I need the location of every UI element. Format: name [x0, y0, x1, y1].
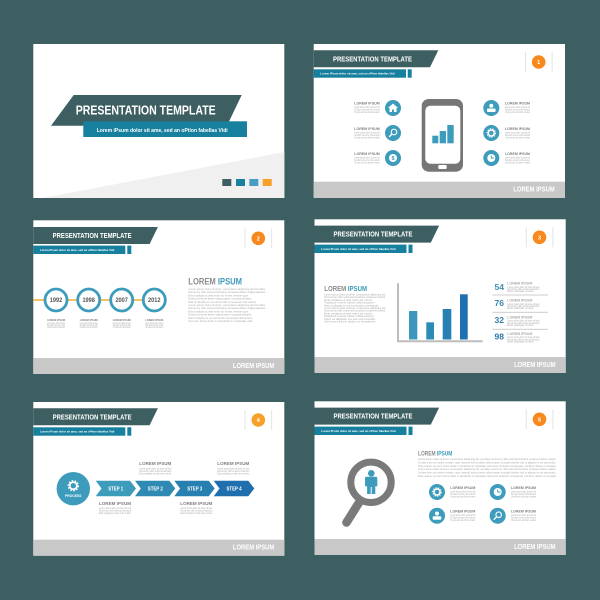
- stat 98: LOREM IPSUM: [507, 332, 532, 336]
- header title: PRESENTATION TEMPLATE: [333, 54, 412, 63]
- icon: home: [385, 100, 401, 116]
- step note 1: Lorem ipsum dolor sit amet elit sed: [99, 507, 131, 510]
- milestone caption 4: LOREM IPSUM: [145, 318, 164, 322]
- stat 32: Lorem ipsum dolor sit amet elit sed: [507, 320, 540, 323]
- stat 76: [494, 298, 540, 310]
- page badge: [245, 410, 272, 430]
- feature label right 3: Lorem ipsum dolor sit amet elit: [505, 156, 530, 159]
- stat 32: Nonummy nibh euismod tincidunt: [507, 322, 540, 325]
- chart body text: Erat volutpat ut wisi enim ad minim: [324, 299, 372, 302]
- footer bar: [314, 539, 566, 555]
- footer bar: LOREM IPSUM: [513, 185, 555, 194]
- milestone caption 4: Ut wisi enim ad minim: [145, 326, 163, 329]
- milestone 2007: 2007: [115, 298, 129, 304]
- search body text: Ut wisi enim ad minim veniam, quis nostrud exerci tation ullamcorper suscipit lobortis nisl ut aliquip ex ea commodo: [418, 472, 556, 475]
- feature label 3: [450, 510, 476, 522]
- milestone 1992: 1992: [50, 298, 63, 304]
- feature label right 3: Sed diam nonummy nibh euismod: [505, 159, 530, 162]
- feature label right 1: LOREM IPSUM: [505, 101, 530, 105]
- text block body: Nostrud exerci tation ullamcorper suscipit lobortis: [188, 314, 252, 317]
- feature label 1: Sed diam nonummy nibh euismod: [450, 493, 476, 496]
- subtitle: Lorem iPsum dolor sit ame, sed an oPtion fabellas Vidi: [97, 128, 228, 134]
- feature label left 2: Sed diam nonummy nibh euismod: [354, 134, 380, 137]
- page badge: 1: [537, 60, 540, 66]
- milestone caption 2: [80, 318, 98, 329]
- chart body text: Nonummy nibh euismod tincidunt ut laoreet dolore: [324, 296, 386, 299]
- feature label left 1: Lorem ipsum dolor sit amet elit: [354, 106, 380, 109]
- feature label 2: Ut wisi enim ad minim veniam: [511, 496, 536, 498]
- feature label left 2: [354, 127, 380, 139]
- footer bar: [33, 358, 284, 374]
- milestone caption 2: LOREM IPSUM: [80, 318, 98, 322]
- step note 3: [180, 501, 213, 515]
- feature label right 3: Ut wisi enim ad minim veniam: [505, 161, 530, 164]
- milestone caption 2: Ut wisi enim ad minim: [80, 326, 98, 329]
- feature label left 1: Ut wisi enim ad minim veniam: [354, 111, 380, 114]
- milestone caption 3: [113, 318, 131, 329]
- stat 76: Nonummy nibh euismod tincidunt: [507, 305, 540, 308]
- feature label 2: [511, 486, 536, 498]
- search body text: Lorem ipsum dolor sit amet, consectetur adipiscing elit, sed diam nonummy nibh euismod tincidunt ut laoreet dolore magna: [418, 468, 556, 471]
- feature label 1: Ut wisi enim ad minim veniam: [450, 496, 475, 498]
- feature label right 1: Lorem ipsum dolor sit amet elit: [505, 106, 530, 109]
- footer bar: LOREM IPSUM: [233, 361, 274, 370]
- search body text: [418, 458, 556, 478]
- stat 98: Erat volutpat ut wisi: [507, 341, 534, 344]
- header title: PRESENTATION TEMPLATE: [53, 231, 132, 240]
- text block body: Nisl ut aliquip ex ea commodo consequat duis autem: [188, 301, 256, 304]
- feature label right 1: Sed diam nonummy nibh euismod: [505, 108, 530, 111]
- header title: PRESENTATION TEMPLATE: [334, 412, 413, 421]
- grey corner wedge: [43, 152, 284, 198]
- milestone caption 1: LOREM IPSUM: [47, 318, 65, 322]
- arrow: step 3: [174, 481, 215, 496]
- page badge: [526, 409, 553, 429]
- arrow: step 1: STEP 1: [108, 486, 123, 492]
- header title: PRESENTATION TEMPLATE: [53, 412, 132, 421]
- milestone caption 3: Ut wisi enim ad minim: [113, 326, 131, 329]
- stat 76: 76: [494, 298, 504, 308]
- panel: title slide: [33, 44, 284, 198]
- milestone 2012: 2012: [148, 298, 161, 304]
- magnifier with person: [346, 462, 391, 522]
- icon: gear: [483, 125, 499, 141]
- header sub bar: [33, 427, 131, 436]
- header sub bar: [33, 246, 131, 254]
- chart body text: [324, 294, 386, 324]
- text block body: Erat volutpat ut wisi enim ad minim veniam quis: [188, 294, 249, 297]
- text block heading: LOREM IPSUM: [188, 276, 242, 286]
- header ribbon: [33, 408, 158, 425]
- icon: dollar: $: [391, 156, 395, 162]
- step note 1: LOREM IPSUM: [99, 501, 131, 506]
- stat 32: [494, 315, 540, 327]
- icon: clock: [490, 484, 506, 500]
- bar chart: [398, 283, 483, 341]
- panel: slide 5 search: [314, 401, 566, 555]
- header sub bar: Lorem iPsum dolor sit ame, sed an oPtion fabellas Vidi: [321, 247, 396, 251]
- header ribbon: [314, 50, 438, 67]
- milestone caption 1: Lorem ipsum dolor sit amet: [47, 322, 65, 325]
- feature label right 1: [505, 101, 530, 114]
- milestone caption 4: Lorem ipsum dolor sit amet: [145, 322, 163, 325]
- step note 2: Erat volutpat ut wisi enim minim: [139, 472, 171, 476]
- header sub bar: Lorem iPsum dolor sit ame, sed an oPtion fabellas Vidi: [320, 72, 395, 76]
- process circle: PROCESS: [65, 493, 82, 498]
- step note 4: Lorem ipsum dolor sit amet elit sed: [217, 467, 250, 470]
- text block body: Nonummy nibh euismod tincidunt ut laoreet dolore magna aliquam: [188, 291, 265, 294]
- feature label 2: LOREM IPSUM: [511, 486, 536, 490]
- feature label left 1: Sed diam nonummy nibh euismod: [354, 108, 380, 111]
- feature label 2: Sed diam nonummy nibh euismod: [511, 493, 536, 496]
- feature label 4: Ut wisi enim ad minim veniam: [511, 519, 536, 522]
- icon: search: [385, 125, 401, 141]
- page badge: 3: [538, 235, 541, 241]
- stat 98: [494, 332, 540, 344]
- feature label 1: [450, 486, 476, 498]
- chart body text: Lorem ipsum dolor sit amet, consectetur adipiscing elit: [324, 307, 386, 310]
- panel: slide 2 timeline: [33, 220, 284, 374]
- text block body: Nostrud exerci tation ullamcorper suscipit lobortis: [188, 298, 252, 301]
- chart body text: Nonummy nibh euismod tincidunt ut laoreet dolore: [324, 310, 386, 313]
- feature label 3: Ut wisi enim ad minim veniam: [450, 519, 475, 522]
- search body text: Duis autem vel eum iriure dolor in hendrerit in vulputate velit esse molestie consequat, vel illum dolore eu feugiat: [418, 475, 556, 478]
- icon: user: [429, 508, 445, 524]
- timeline: [33, 289, 165, 311]
- milestone caption 1: [47, 318, 65, 329]
- milestone caption 3: Sed diam nonummy nibh: [113, 324, 131, 327]
- step note 2: LOREM IPSUM: [139, 461, 171, 466]
- title banner: [51, 95, 242, 126]
- milestone caption 1: Sed diam nonummy nibh: [47, 324, 65, 327]
- feature label left 3: Lorem ipsum dolor sit amet elit: [354, 156, 380, 159]
- step note 1: [99, 501, 131, 515]
- step note 2: [139, 461, 172, 476]
- feature label left 3: Ut wisi enim ad minim veniam: [354, 161, 380, 164]
- step note 4: LOREM IPSUM: [217, 461, 249, 466]
- feature label left 1: [354, 101, 380, 114]
- stat 54: 54: [494, 282, 504, 292]
- icon: search: [490, 508, 506, 524]
- stat 76: LOREM IPSUM: [507, 299, 532, 303]
- footer bar: [314, 182, 565, 198]
- feature label right 3: LOREM IPSUM: [505, 152, 530, 156]
- chart body text: Erat volutpat ut wisi enim ad minim: [324, 312, 372, 315]
- feature label right 2: LOREM IPSUM: [505, 127, 530, 131]
- header ribbon: [314, 226, 439, 243]
- stat 98: Nonummy nibh euismod tincidunt: [507, 338, 540, 341]
- stat 54: Nonummy nibh euismod tincidunt: [507, 288, 540, 291]
- step note 3: Erat volutpat ut wisi enim minim: [180, 512, 212, 515]
- milestone caption 3: LOREM IPSUM: [113, 318, 131, 322]
- page badge: 5: [538, 417, 541, 423]
- chart heading: LOREM IPSUM: [324, 284, 367, 293]
- milestone caption 4: Sed diam nonummy nibh: [145, 324, 164, 327]
- step note 4: [217, 461, 250, 476]
- stat 54: [494, 282, 540, 293]
- footer bar: [314, 357, 566, 373]
- text block body: Nisl ut aliquip ex ea commodo consequat duis autem: [188, 317, 252, 320]
- stat 76: Lorem ipsum dolor sit amet elit sed: [507, 303, 540, 306]
- header sub bar: Lorem iPsum dolor sit ame, sed an oPtion fabellas Vidi: [40, 430, 114, 434]
- header ribbon: [314, 408, 439, 425]
- colour swatches: [222, 179, 272, 186]
- stat 32: Erat volutpat ut wisi: [507, 324, 534, 327]
- header sub bar: [314, 245, 412, 253]
- feature label 1: LOREM IPSUM: [450, 486, 475, 490]
- feature label 3: LOREM IPSUM: [450, 510, 475, 514]
- feature label right 3: [505, 152, 530, 164]
- milestone caption 2: Sed diam nonummy nibh: [80, 324, 98, 327]
- icon: user: [483, 100, 499, 116]
- subtitle bar: [83, 121, 247, 137]
- feature label right 1: Ut wisi enim ad minim veniam: [505, 111, 530, 114]
- text block body: Lorem ipsum dolor sit amet, consectetur adipiscing elit sed diam: [188, 288, 265, 291]
- process circle: [57, 472, 90, 505]
- footer bar: LOREM IPSUM: [514, 542, 556, 551]
- arrow: step 4: STEP 4: [226, 486, 242, 492]
- header sub bar: Lorem iPsum dolor sit ame, sed an oPtion fabellas Vidi: [40, 248, 114, 252]
- text block body: Nonummy nibh euismod tincidunt ut laoreet dolore magna aliquam: [188, 307, 265, 310]
- chart body text: Nostrud exerci tation ullamcorper: [324, 302, 375, 305]
- search body text: Duis autem vel eum iriure dolor in hendrerit in vulputate velit esse molestie consequat, vel illum dolore eu feugiat: [418, 465, 556, 468]
- text block body: [188, 288, 265, 323]
- arrow: step 4: [214, 481, 254, 496]
- arrow: step 1: [96, 481, 136, 496]
- feature label 3: Lorem ipsum dolor sit amet elit: [450, 514, 476, 517]
- milestone caption 2: Lorem ipsum dolor sit amet: [80, 322, 98, 325]
- text block body: Erat volutpat ut wisi enim ad minim veniam quis: [188, 310, 249, 313]
- step note 3: Lorem ipsum dolor sit amet elit sed: [180, 507, 213, 510]
- page badge: [245, 228, 272, 248]
- step note 1: Erat volutpat ut wisi enim minim: [99, 512, 131, 515]
- stat 54: LOREM IPSUM: [507, 282, 532, 286]
- header sub bar: [314, 69, 412, 78]
- feature label 1: Lorem ipsum dolor sit amet elit: [450, 490, 476, 494]
- stat 98: Lorem ipsum dolor sit amet elit sed: [507, 336, 540, 339]
- header ribbon: [33, 227, 158, 244]
- step note 4: Erat volutpat ut wisi enim minim: [217, 472, 249, 476]
- arrow: step 2: [135, 481, 175, 496]
- header sub bar: Lorem iPsum dolor sit ame, sed an oPtion fabellas Vidi: [321, 429, 396, 433]
- arrow: step 2: STEP 2: [148, 486, 163, 492]
- step note 4: Nonummy nibh euismod tincidunt: [217, 470, 250, 473]
- icon: clock: [483, 150, 499, 166]
- chart body text: Nisl ut aliquip ex ea commodo consequat: [324, 304, 379, 307]
- step note 2: Lorem ipsum dolor sit amet elit sed: [139, 467, 172, 470]
- feature label left 3: LOREM IPSUM: [354, 152, 380, 156]
- stat 76: Erat volutpat ut wisi: [507, 307, 534, 310]
- chart body text: Vel eum iriure dolor in hendrerit: [324, 320, 376, 324]
- step note 3: LOREM IPSUM: [180, 501, 212, 506]
- panel: slide 1 phone: [314, 44, 565, 198]
- stat 32: 32: [494, 315, 504, 325]
- chart body text: Nisl ut aliquip ex ea commodo: [324, 318, 376, 321]
- text block body: Vel eum iriure dolor in hendrerit in vulputate velit: [188, 320, 253, 323]
- icon: gear: [429, 484, 445, 500]
- panel: slide 4 process: [33, 402, 284, 556]
- arrow: step 3: STEP 3: [187, 486, 202, 492]
- feature label left 2: Ut wisi enim ad minim veniam: [354, 136, 380, 139]
- page badge: [525, 52, 552, 72]
- feature label right 2: [505, 127, 530, 139]
- title: PRESENTATION TEMPLATE: [76, 102, 216, 118]
- feature label left 1: LOREM IPSUM: [354, 101, 380, 105]
- milestone caption 4: [145, 318, 164, 329]
- stat 54: Lorem ipsum dolor sit amet elit sed: [507, 286, 540, 289]
- milestone caption 3: Lorem ipsum dolor sit amet: [113, 322, 131, 325]
- feature label 2: Lorem ipsum dolor sit amet elit: [511, 490, 536, 494]
- feature label left 2: Lorem ipsum dolor sit amet elit: [354, 131, 380, 134]
- step note 1: Nonummy nibh euismod tincidunt: [99, 510, 131, 513]
- feature label 4: [511, 510, 536, 522]
- feature label left 3: Sed diam nonummy nibh euismod: [354, 159, 380, 162]
- page badge: 2: [257, 236, 260, 242]
- footer bar: [33, 540, 284, 556]
- feature label left 3: [354, 152, 380, 164]
- chart body text: Nostrud exerci tation ullamcorper: [324, 315, 375, 318]
- feature label 4: Sed diam nonummy nibh euismod: [511, 517, 536, 520]
- header sub bar: [314, 427, 412, 435]
- feature label right 2: Sed diam nonummy nibh euismod: [505, 134, 530, 137]
- stat 54: Erat volutpat ut wisi: [507, 290, 534, 293]
- footer bar: LOREM IPSUM: [233, 543, 274, 552]
- feature label right 2: Lorem ipsum dolor sit amet elit: [505, 131, 530, 134]
- search body text: Lorem ipsum dolor sit amet, consectetur adipiscing elit, sed diam nonummy nibh euismod tincidunt ut laoreet dolore magna: [418, 458, 556, 461]
- feature label right 2: Ut wisi enim ad minim veniam: [505, 136, 530, 139]
- page badge: [526, 227, 553, 247]
- icon: dollar: [385, 150, 401, 166]
- feature label left 2: LOREM IPSUM: [354, 127, 380, 131]
- text block body: Lorem ipsum dolor sit amet, consectetur adipiscing elit sed diam: [188, 304, 265, 307]
- stat 98: 98: [494, 332, 504, 342]
- panel: slide 3 chart: [314, 219, 566, 373]
- feature label 4: Lorem ipsum dolor sit amet elit: [511, 514, 536, 517]
- search heading: LOREM IPSUM: [418, 451, 452, 457]
- footer bar: LOREM IPSUM: [514, 360, 556, 369]
- feature label 4: LOREM IPSUM: [511, 510, 536, 514]
- milestone caption 1: Ut wisi enim ad minim: [47, 326, 65, 329]
- search body text: Ut wisi enim ad minim veniam, quis nostrud exerci tation ullamcorper suscipit lobortis nisl ut aliquip ex ea commodo: [418, 461, 556, 464]
- phone illustration: [422, 99, 463, 172]
- feature label 3: Sed diam nonummy nibh euismod: [450, 517, 476, 520]
- header title: PRESENTATION TEMPLATE: [334, 230, 413, 239]
- stat 32: LOREM IPSUM: [507, 315, 532, 319]
- step note 2: Nonummy nibh euismod tincidunt: [139, 470, 172, 473]
- page badge: 4: [257, 418, 261, 424]
- milestone 1998: 1998: [82, 298, 96, 304]
- step note 3: Nonummy nibh euismod tincidunt: [180, 510, 213, 513]
- chart body text: Lorem ipsum dolor sit amet, consectetur adipiscing elit: [324, 294, 386, 296]
